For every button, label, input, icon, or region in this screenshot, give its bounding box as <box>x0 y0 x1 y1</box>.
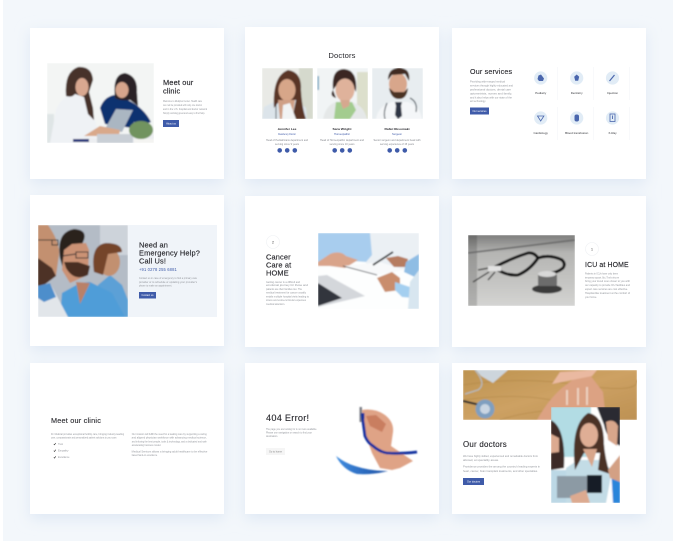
photo: two women with tablet <box>47 63 154 143</box>
text block: Providing wide-ranged medical <box>470 81 505 84</box>
left text block: Dr. Medical provides exceptional fertility care, bringing industry-leading <box>51 433 125 436</box>
text block <box>139 277 198 288</box>
panel: emergency help <box>30 195 224 346</box>
text block: entails multiple hospital visits leading to <box>266 296 310 299</box>
panel: our services <box>452 28 646 179</box>
team names and details: Rafat Obsomaki <box>384 127 410 131</box>
text block <box>585 273 631 299</box>
panel: doctors <box>245 27 439 179</box>
service: injection <box>606 71 619 95</box>
checklist: Trust <box>58 443 63 446</box>
text block: destination. <box>266 435 278 438</box>
team names and details: Head of Pediatricians department and <box>266 139 309 142</box>
service: pediatry <box>534 71 547 95</box>
photo: wooden table with stethoscope and hands <box>463 370 637 420</box>
text block: and it also helps with our state of the <box>470 96 513 99</box>
text block: emotional journey for those and <box>266 284 309 287</box>
text block: Getting cancer is a difficult and <box>266 281 301 284</box>
service: blood transfusion <box>565 111 589 135</box>
text block: medical treatment for cancer usually <box>266 292 307 295</box>
blue contact panel <box>128 225 217 317</box>
button: Contact us <box>142 294 154 297</box>
number badge <box>266 236 280 248</box>
text block: Welcome to Medplus Center. Health care <box>163 100 203 103</box>
photo: doctor 3 <box>372 68 423 119</box>
button <box>139 292 156 298</box>
button: About us <box>166 122 177 125</box>
button <box>163 120 179 127</box>
panel: ICU at home <box>452 196 646 347</box>
text block: patients are their families too. The <box>266 288 303 291</box>
heading: Meet our clinic <box>51 416 101 425</box>
photo: doctor with clipboard and laptop <box>318 233 419 309</box>
text block: The page you are looking for is no more available. <box>266 428 317 431</box>
button <box>470 108 489 114</box>
text block <box>470 81 514 103</box>
left text block: care, compassionate and personalized patient solutions to your care. <box>51 437 117 440</box>
service: x-ray: X-Ray <box>608 131 617 135</box>
photo: doctor 1 <box>262 68 313 119</box>
right text block: and infusing the best people, tools & technology, and a dedicated and safe <box>132 441 207 444</box>
right text block: Medical Services allows a bringing adult healthcare to be effective <box>132 451 208 454</box>
service: pediatry: Pediatry <box>535 91 547 95</box>
right text block <box>132 433 208 457</box>
team names and details <box>266 127 421 146</box>
illustration: hand holding stethoscope <box>336 407 417 474</box>
text block: medical attention. <box>266 303 285 306</box>
heading <box>266 252 291 278</box>
heading: ICU at HOME <box>585 262 629 269</box>
team names and details: Surgeon <box>392 133 403 136</box>
right text block: and aligned physician workforce with advancing medical science, <box>132 437 207 440</box>
heading: Cancer <box>266 252 291 261</box>
right text block: based hand-on excellence. <box>132 454 158 457</box>
heading: clinic <box>163 86 180 96</box>
button <box>463 478 484 485</box>
text block: Contact us in case of emergency to find a primary care <box>139 277 198 280</box>
heading: Need an <box>139 240 168 250</box>
heading: HOME <box>266 269 289 278</box>
text block: bring your loved ones closer to you with <box>585 280 631 283</box>
panel: 404 error <box>245 363 439 514</box>
text block <box>463 455 541 473</box>
text block: stress and extra-curricular expenses <box>266 299 307 302</box>
photo: three doctors in profile <box>38 225 128 317</box>
checklist: Excellence <box>58 456 70 459</box>
heading: Call Us! <box>139 256 166 266</box>
heading <box>163 78 194 96</box>
text block: provider or to schedule or updating your provider's <box>139 281 198 284</box>
left text block <box>51 433 125 440</box>
right text block: accelerating business model. <box>132 444 161 447</box>
panel: meet our clinic with photo <box>30 28 224 179</box>
text block: Providence provides the among the country's leading experts in <box>463 466 541 469</box>
text block: Patients in ICUs have only been <box>585 273 619 276</box>
number badge <box>586 242 598 256</box>
heading: Doctors <box>328 51 356 60</box>
service: dentistry <box>570 71 583 95</box>
team names and details: Jennifer Lee <box>278 127 297 131</box>
text block: Simply working great and easy to find help. <box>163 112 205 115</box>
text block: heart, cancer, brain transplant treatments, and other specialties. <box>463 470 538 473</box>
heading: Emergency Help? <box>139 248 200 258</box>
phone number: +91 0278 255 6881 <box>139 267 178 272</box>
text block: abroad, at speciality areas. <box>463 459 499 462</box>
number badge: 2 <box>272 240 275 244</box>
text block: services through highly educated and <box>470 85 514 88</box>
panel: meet our clinic text <box>30 363 224 514</box>
photo: stethoscope on table <box>468 235 575 306</box>
checklist: Empathy <box>58 450 69 453</box>
text block: professional doctors, dental care <box>470 88 512 91</box>
team names and details: serving experience of 15 years <box>380 143 415 146</box>
text block: temporary support. But, That's why we <box>585 277 619 280</box>
text block: and in the U.S. hospital and doctor network <box>163 108 208 111</box>
photo: doctor 2 <box>317 68 368 119</box>
team names and details: Sara Wright <box>332 127 352 131</box>
team names and details: Residency Doctor <box>278 133 296 136</box>
heading: 404 Error! <box>266 413 309 423</box>
service: injection: Injection <box>607 91 618 95</box>
text block: our capacity to provide ICU facilities and <box>585 284 631 287</box>
heading: Our services <box>470 68 512 76</box>
text block: can not be provided with only one doctor <box>163 104 202 107</box>
number badge: 1 <box>591 246 594 252</box>
panel: cancer care at home <box>245 196 439 347</box>
text block: optometrists, nurses and family, <box>470 92 512 95</box>
team names and details: Head of Homeopathic department and <box>320 139 365 142</box>
button: Our services <box>472 110 487 113</box>
text block: Please use navigation or search to find your <box>266 432 312 435</box>
text block: your home. <box>585 296 597 299</box>
service: cardiology: Cardiology <box>534 131 548 135</box>
team names and details: Homeopathic <box>334 133 351 136</box>
team names and details: serving since 10 years <box>330 143 355 146</box>
grid dividers <box>558 67 630 140</box>
text block: Hospital-like treatment at the comfort of <box>585 292 630 295</box>
checklist <box>54 443 70 459</box>
text block <box>163 100 208 115</box>
service: x-ray <box>606 111 619 135</box>
button <box>266 448 285 455</box>
text block <box>266 428 317 438</box>
panel: our doctors <box>452 363 646 514</box>
team names and details: serving since 9 years <box>275 143 300 146</box>
service: blood transfusion: Blood transfusion <box>565 131 589 135</box>
social icons <box>277 148 407 153</box>
text block <box>266 281 310 306</box>
text block: We have highly skilled, experienced and remarkable doctors from <box>463 455 538 458</box>
text block: phone to make an appointment. <box>139 285 172 288</box>
photo: doctors with tablet <box>551 407 620 503</box>
button: Go to home <box>269 450 283 453</box>
text block: art technology. <box>470 100 486 103</box>
team names and details: Senior surgeon and department head with <box>374 139 421 142</box>
right text block: Our mission will fulfill the need for a leading care by supporting a caring <box>132 433 207 436</box>
heading: Meet our <box>163 78 194 87</box>
heading <box>139 240 200 266</box>
heading: Our doctors <box>463 440 507 449</box>
button: Our doctors <box>467 480 481 483</box>
heading: Care at <box>266 260 291 270</box>
service: dentistry: Dentistry <box>571 91 583 95</box>
text block: expert care services are cost effective. <box>585 288 628 291</box>
service: cardiology <box>534 111 548 135</box>
